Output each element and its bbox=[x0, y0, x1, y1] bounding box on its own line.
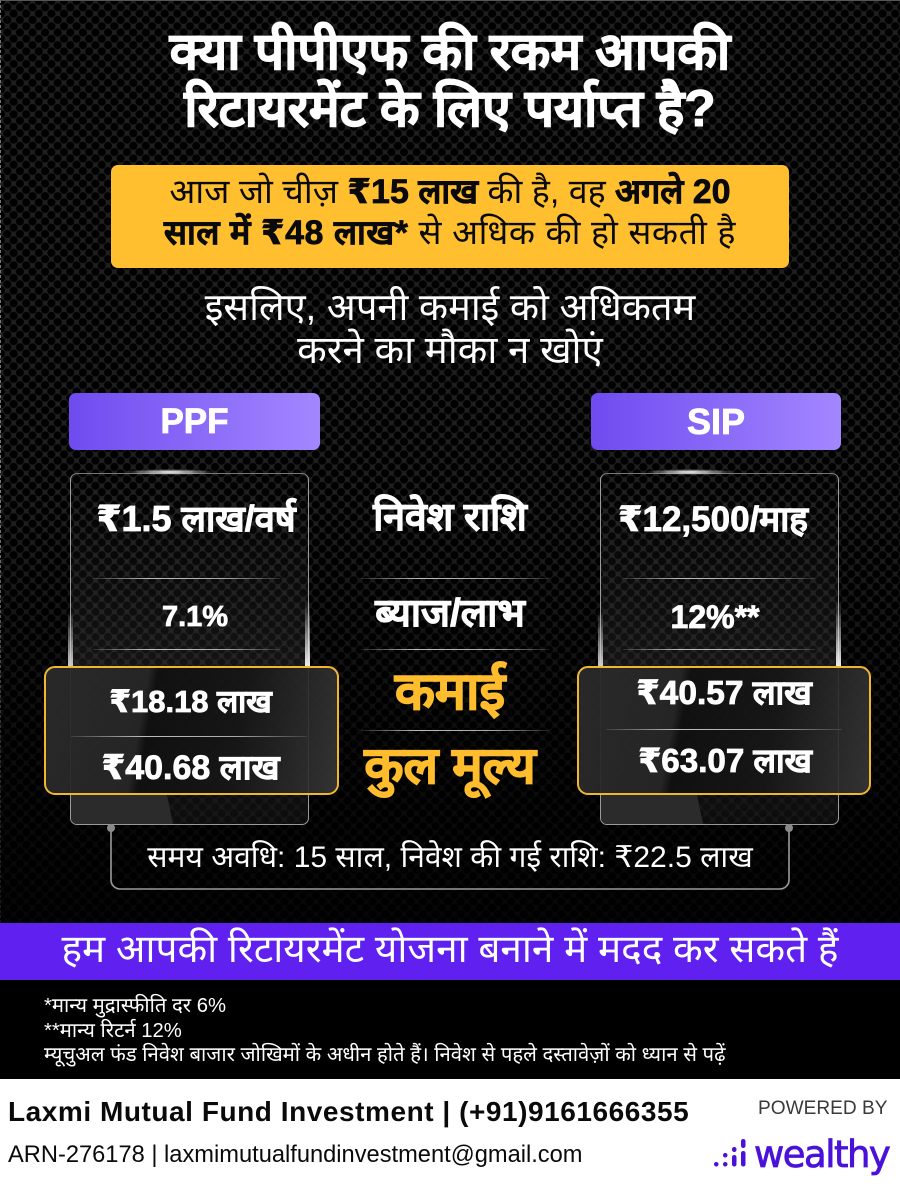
label: investment amount: निवेश राशि bbox=[373, 496, 527, 539]
SIP header bbox=[591, 393, 841, 450]
SIP investment amount: ₹12,500/माह bbox=[618, 500, 808, 539]
subheading: इसलिए, अपनी कमाई को अधिकतम bbox=[205, 287, 695, 329]
title: क्या पीपीएफ की रकम आपकी bbox=[170, 22, 730, 80]
label: total value: कुल मूल्य bbox=[364, 737, 536, 794]
decorative glows bbox=[125, 469, 215, 475]
ARN and email: ARN-276178 | laxmimutualfundinvestment@gmail.com bbox=[8, 1142, 582, 1168]
background: dotted dark texture bbox=[0, 0, 900, 923]
logo: wealthy: wealthy bbox=[754, 1133, 889, 1176]
SIP total value: ₹63.07 लाख bbox=[638, 743, 812, 780]
banner: purple call to action bbox=[0, 923, 900, 980]
text: time period: समय अवधि: 15 साल, निवेश की गई राशि: ₹22.5 लाख bbox=[147, 841, 753, 874]
callout: inflation banner bbox=[111, 165, 789, 268]
disclaimer: *मान्य मुद्रास्फीति दर 6% bbox=[44, 995, 226, 1017]
banner: purple call to action: हम आपकी रिटायरमेंट योजना बनाने में मदद कर सकते हैं bbox=[62, 928, 838, 971]
label: earnings: कमाई bbox=[395, 663, 505, 721]
SIP interest: 12%** bbox=[671, 599, 759, 635]
powered by: POWERED BY bbox=[758, 1098, 887, 1119]
title bbox=[168, 22, 732, 137]
icon: rising dots bbox=[714, 1139, 746, 1166]
footer: contact strip bbox=[0, 1079, 900, 1195]
disclaimer: म्यूचुअल फंड निवेश बाजार जोखिमों के अधीन होते हैं। निवेश से पहले दस्तावेज़ों को ध्यान से पढ़ें bbox=[44, 1044, 726, 1066]
SIP earnings value: ₹40.57 लाख bbox=[636, 675, 812, 712]
disclaimer: **मान्य रिटर्न 12% bbox=[44, 1020, 182, 1042]
bracket: time period connector bbox=[107, 824, 793, 890]
SIP header: SIP bbox=[687, 401, 745, 442]
disclaimer bbox=[44, 994, 726, 1067]
subheading bbox=[204, 286, 696, 372]
PPF total value: ₹40.68 लाख bbox=[102, 749, 279, 787]
label: interest: ब्याज/लाभ bbox=[375, 592, 525, 635]
PPF investment amount: ₹1.5 लाख/वर्ष bbox=[96, 498, 296, 539]
panel: SIP glass card bbox=[600, 473, 839, 825]
contact name and phone: Laxmi Mutual Fund Investment | (+91)9161666355 bbox=[8, 1096, 689, 1127]
callout: inflation banner: आज जो चीज़ ₹15 लाख की है, वह अगले 20 bbox=[169, 173, 731, 211]
subheading: करने का मौका न खोएं bbox=[297, 329, 603, 372]
panel: PPF earnings highlight bbox=[44, 666, 339, 795]
PPF earnings value: ₹18.18 लाख bbox=[109, 684, 272, 719]
PPF interest: 7.1% bbox=[162, 601, 228, 633]
panel: PPF glass card bbox=[70, 473, 309, 825]
title: रिटायरमेंट के लिए पर्याप्त है? bbox=[184, 79, 716, 137]
PPF header: PPF bbox=[160, 402, 229, 441]
PPF header bbox=[69, 393, 320, 450]
callout: inflation banner: साल में ₹48 लाख* से अधिक की हो सकती है bbox=[164, 214, 736, 252]
panel: SIP earnings highlight bbox=[577, 666, 871, 795]
